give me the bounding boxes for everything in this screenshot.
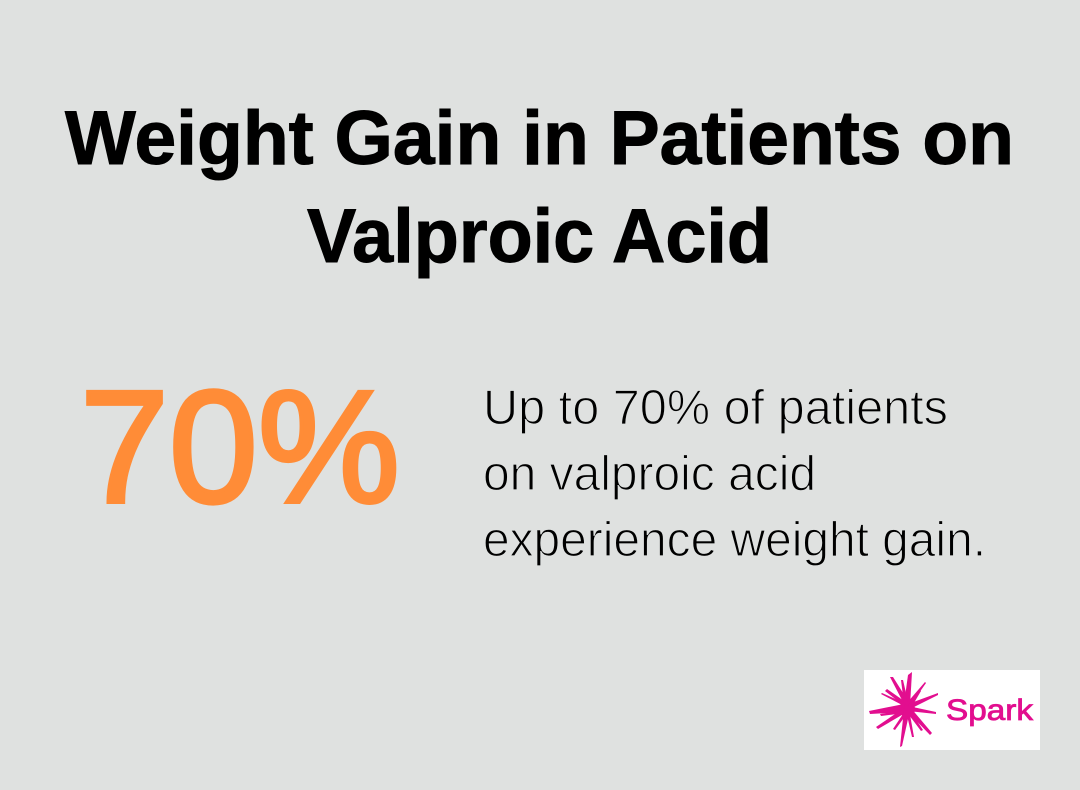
description text: Up to 70% of patients <box>483 381 948 435</box>
logo wordmark: Spark <box>946 694 1034 727</box>
description text: experience weight gain. <box>483 513 986 567</box>
description text: on valproic acid <box>483 447 816 501</box>
icon: spark starburst <box>869 672 938 747</box>
title <box>65 96 1014 279</box>
title: Weight Gain in Patients on <box>65 96 1014 181</box>
logo: Spark <box>864 670 1040 750</box>
description text <box>483 381 986 567</box>
big statistic: 70%: 70% <box>80 357 400 536</box>
title: Valproic Acid <box>307 194 772 279</box>
